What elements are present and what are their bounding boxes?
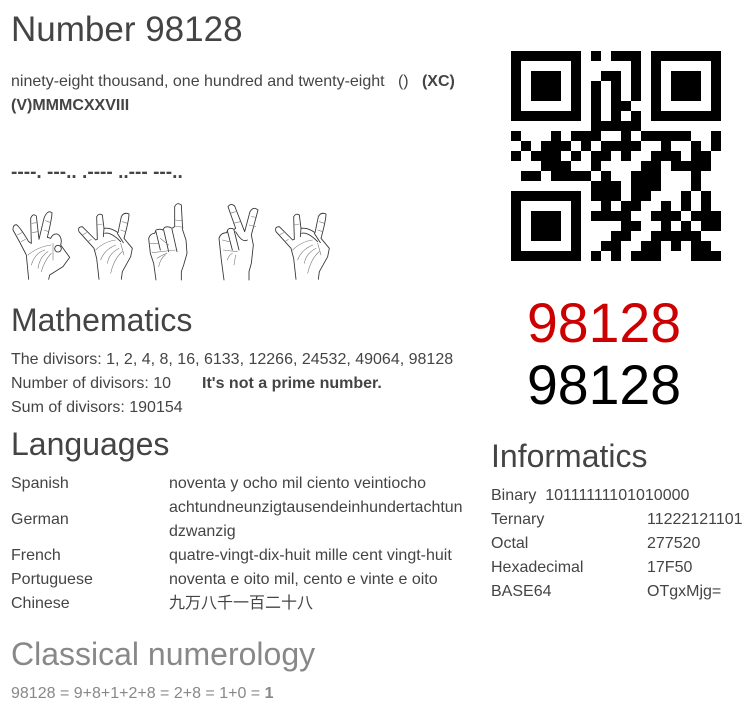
number name and roman numeral: [11, 73, 455, 114]
translation: spanish: noventa y ocho mil ciento veintiocho: [169, 475, 426, 492]
mathematics facts: The divisors: 1, 2, 4, 8, 16, 6133, 12266, 24532, 49064, 98128: [11, 351, 453, 368]
heading: mathematics: Mathematics: [11, 302, 192, 338]
mathematics facts: Sum of divisors: 190154: [11, 399, 183, 416]
numerology sum: 98128 = 9+8+1+2+8 = 2+8 = 1+0 = 1: [11, 685, 273, 702]
informatics table: 277520: [647, 535, 700, 552]
row: base64: BASE64: [491, 583, 551, 600]
icon: hand eight repeat: [276, 213, 329, 279]
heading: languages: Languages: [11, 426, 169, 462]
icon: sign language hands: [12, 203, 330, 280]
icon: hand one: [149, 204, 187, 280]
row: german: German: [11, 511, 69, 528]
mathematics facts: It's not a prime number.: [202, 375, 382, 392]
informatics table: [491, 487, 743, 600]
informatics table: 17F50: [647, 559, 692, 576]
row: ternary: [491, 511, 743, 528]
row: portuguese: Portuguese: [11, 571, 93, 588]
languages table: [11, 475, 463, 612]
translation: french: quatre-vingt-dix-huit mille cent vingt-huit: [169, 547, 452, 564]
row: hexadecimal: Hexadecimal: [491, 559, 583, 576]
qr code: [511, 51, 721, 261]
mathematics facts: Number of divisors: 10: [11, 375, 171, 392]
row: octal: [491, 535, 700, 552]
informatics table: OTgxMjg=: [647, 583, 721, 600]
informatics table: 11222121101: [647, 511, 743, 528]
title: Number 98128: [11, 10, 243, 49]
row: spanish: Spanish: [11, 475, 69, 492]
heading: informatics: Informatics: [491, 438, 647, 474]
translation: german: achtundneunzigtausendeinhundertachtun: [169, 499, 463, 516]
translation: german: [169, 499, 463, 540]
row: binary: Binary 10111111101010000: [491, 487, 689, 504]
row: chinese: Chinese: [11, 595, 70, 612]
mathematics facts: [11, 351, 453, 416]
icon: hand eight: [79, 213, 132, 279]
icon: hand two: [219, 204, 258, 280]
row: ternary: Ternary: [491, 511, 544, 528]
translation: german: dzwanzig: [169, 523, 236, 540]
number name and roman numeral: ninety-eight thousand, one hundred and twenty-eight () (XC): [11, 73, 455, 90]
number in red: 98128: [527, 292, 681, 354]
number in black: 98128: [527, 354, 681, 416]
row: hexadecimal: [491, 559, 692, 576]
number name and roman numeral: (V)MMMCXXVIII: [11, 97, 129, 114]
icon: hand nine: [13, 212, 70, 279]
translation: portuguese: noventa e oito mil, cento e vinte e oito: [169, 571, 438, 588]
row: base64: [491, 583, 721, 600]
row: octal: Octal: [491, 535, 528, 552]
row: french: French: [11, 547, 61, 564]
translation: chinese: 九万八千一百二十八: [169, 595, 313, 612]
heading: classical numerology: Classical numerology: [11, 636, 315, 672]
morse code: ----. ---.. .---- ..--- ---..: [11, 162, 183, 183]
